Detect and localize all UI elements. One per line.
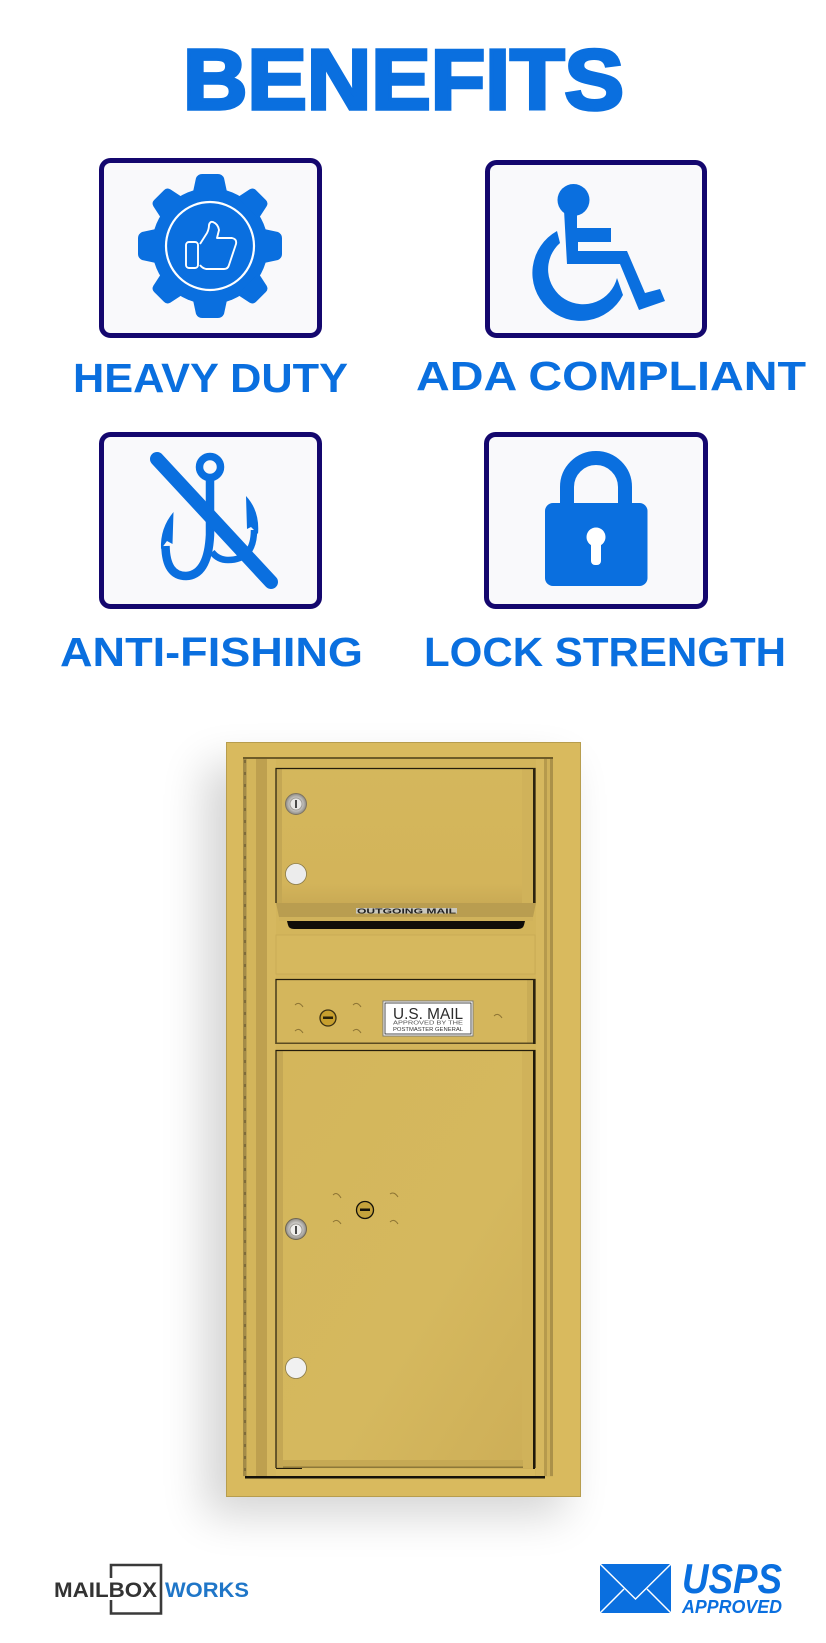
icon: gear with thumbs up <box>138 174 282 318</box>
inner frame <box>243 758 553 1477</box>
key lock: lower door <box>356 1202 374 1218</box>
right frame strips <box>536 759 544 1476</box>
mailbox shadow <box>205 765 565 1515</box>
logo square <box>111 1565 161 1614</box>
hinge strip <box>243 759 246 1476</box>
panel: ada compliant <box>416 162 806 399</box>
usps wordmark: USPS <box>682 1555 782 1602</box>
approved wordmark: APPROVED <box>681 1597 782 1617</box>
u.s. mail plate: APPROVED BY THE <box>393 1020 464 1026</box>
label: ada compliant: ADA COMPLIANT <box>416 353 806 399</box>
u.s. mail plate: U.S. MAIL <box>393 1006 463 1023</box>
icon: padlock <box>545 458 648 586</box>
mailbox illustration <box>205 742 580 1515</box>
door button: lower door <box>286 1358 306 1378</box>
logo wordmark: works: WORKS <box>165 1579 249 1602</box>
lock: upper door <box>286 794 306 814</box>
door button: upper door <box>286 864 306 884</box>
mail slot <box>287 921 525 929</box>
middle compartment door <box>276 979 535 1044</box>
logo: usps approved <box>600 1555 782 1617</box>
panel: anti-fishing <box>60 434 363 675</box>
icon box: heavy duty <box>102 160 320 336</box>
rivets: middle door <box>295 1003 502 1033</box>
icon box: ada compliant <box>488 162 704 336</box>
outgoing mail label: OUTGOING MAIL <box>357 908 457 916</box>
u.s. mail plate <box>383 1001 473 1036</box>
lock: lower door <box>286 1218 306 1240</box>
outgoing mail label <box>356 908 457 916</box>
label: heavy duty: HEAVY DUTY <box>73 355 348 401</box>
rivets: lower door <box>333 1193 398 1224</box>
icon box: lock strength <box>486 434 706 606</box>
lower parcel door <box>276 1050 535 1476</box>
label: lock strength: LOCK STRENGTH <box>424 629 786 675</box>
logo: mailbox works <box>54 1565 249 1614</box>
logo wordmark: mailbox: MAILBOX <box>54 1579 157 1602</box>
icon box: anti-fishing <box>102 434 320 606</box>
master lock: middle door <box>320 1010 336 1026</box>
label: anti-fishing: ANTI-FISHING <box>60 629 363 675</box>
panel: lock strength <box>424 434 786 675</box>
icon: envelope <box>600 1564 671 1613</box>
panel: heavy duty <box>73 160 348 401</box>
upper compartment door <box>276 768 535 904</box>
u.s. mail plate: POSTMASTER GENERAL <box>393 1027 463 1033</box>
icon: crossed-out fishing hook <box>157 456 271 582</box>
outgoing mail shelf <box>276 903 536 974</box>
outer frame <box>226 742 580 1496</box>
title: BENEFITS <box>183 33 624 128</box>
icon: wheelchair <box>532 184 665 321</box>
